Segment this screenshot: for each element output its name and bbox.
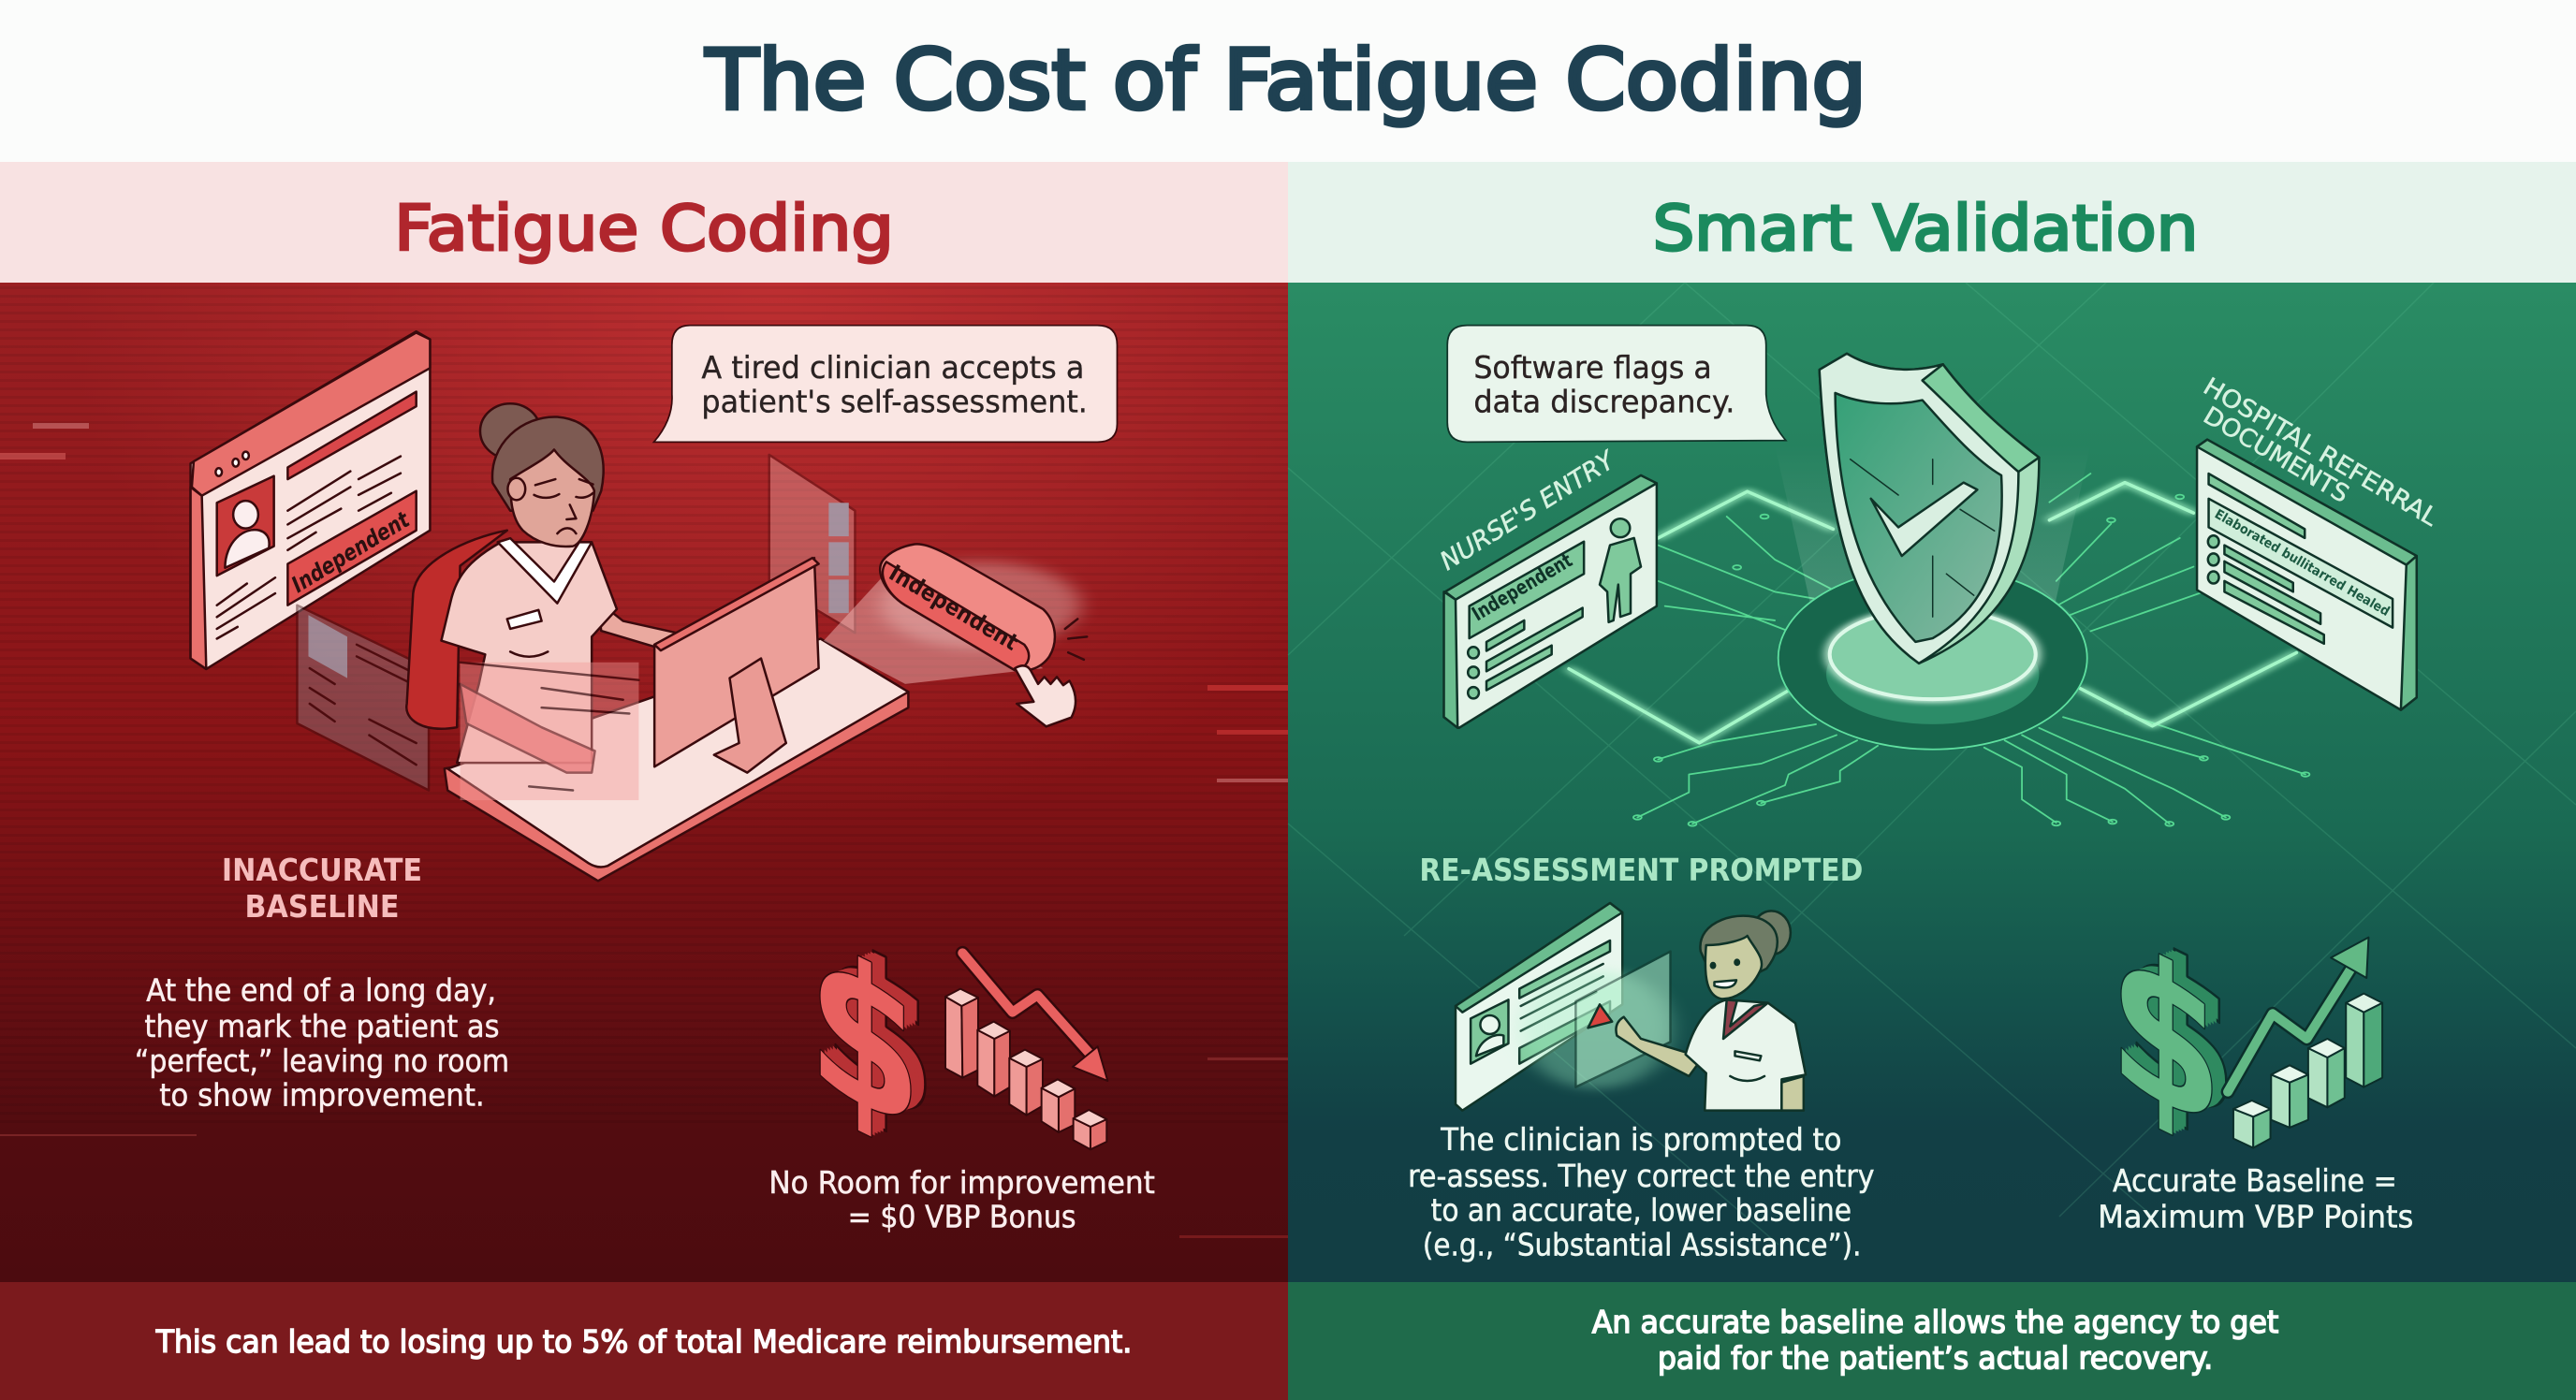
callout: tired clinician	[654, 326, 1117, 442]
text: end of a long day	[135, 972, 509, 1114]
label: hospital referral documents: DOCUMENTS	[2198, 401, 2353, 509]
footer: fatigue coding	[0, 1282, 1288, 1400]
title: The Cost of Fatigue Coding	[705, 32, 1866, 128]
text: accurate baseline	[2098, 1163, 2413, 1235]
callout: tired clinician: A tired clinician accepts a	[701, 350, 1084, 386]
text: clinician is prompted: (e.g., “Substantial Assistance”).	[1423, 1228, 1862, 1263]
illustration: nurse reassessing	[1456, 903, 1806, 1111]
text: no room for improvement: = $0 VBP Bonus	[848, 1200, 1076, 1235]
label: inaccurate baseline: INACCURATE	[222, 853, 422, 888]
dollar sign: $	[808, 900, 921, 1179]
panel: smart validation	[1288, 162, 2576, 1400]
glow: button beam	[824, 566, 1043, 684]
header band: fatigue coding: Fatigue Coding	[394, 192, 894, 265]
shield with check	[1820, 354, 2039, 664]
label: inaccurate baseline: BASELINE	[245, 889, 399, 925]
header band: smart validation: Smart Validation	[1653, 192, 2198, 265]
ghost overlay on desk	[461, 663, 638, 800]
label: independent on button: Independent	[885, 560, 1023, 656]
callout: software flags: data discrepancy.	[1473, 385, 1734, 420]
dollar sign: $	[2115, 896, 2229, 1174]
text: clinician is prompted: to an accurate, lower baseline	[1431, 1193, 1852, 1229]
card: hospital referral documents	[2197, 440, 2417, 710]
dollar sign: $	[812, 899, 925, 1178]
holographic overlay	[1521, 952, 1672, 1088]
label: inaccurate baseline	[222, 853, 422, 925]
panel background: red	[0, 283, 1288, 1282]
rising bars	[2228, 938, 2382, 1148]
label: re-assessment prompted: RE-ASSESSMENT PROMPTED	[1419, 853, 1863, 888]
text: end of a long day: “perfect,” leaving no room	[135, 1043, 509, 1079]
text: end of a long day: to show improvement.	[159, 1078, 485, 1114]
text: accurate baseline: Accurate Baseline =	[2113, 1163, 2397, 1199]
dollar sign: $	[814, 897, 928, 1176]
chair	[406, 531, 507, 729]
light beam	[1775, 445, 2090, 660]
label: independent on record: Independent	[287, 506, 415, 598]
diagram: circuit with shield	[1444, 354, 2417, 826]
text: clinician is prompted: re-assess. They correct the entry	[1408, 1159, 1875, 1194]
text: no room for improvement	[768, 1165, 1155, 1235]
monitor	[654, 558, 819, 773]
panel background: green	[1288, 283, 2576, 1282]
dollar sign: $	[823, 895, 936, 1174]
text: end of a long day: At the end of a long day,	[146, 972, 496, 1008]
label: independent on card: Independent	[1468, 549, 1576, 625]
illustration: nurse at desk	[191, 331, 1087, 881]
button: independent	[880, 544, 1081, 671]
footer: fatigue coding: This can lead to losing up to 5% of total Medicare reimbursement.	[155, 1324, 1132, 1360]
record window	[1456, 903, 1622, 1111]
circular platform	[1778, 567, 2087, 750]
header band: smart validation	[1288, 162, 2576, 283]
dollar sign: $	[2124, 893, 2237, 1172]
panel: fatigue coding	[0, 162, 1288, 1400]
text: accurate baseline: Maximum VBP Points	[2098, 1200, 2413, 1235]
ghost form right	[769, 455, 855, 633]
nurse	[1616, 911, 1806, 1111]
glowing circuit traces	[1569, 483, 2296, 743]
card: nurse's entry	[1444, 475, 1657, 728]
icon: rising dollar	[2109, 893, 2382, 1177]
callout: software flags: Software flags a	[1473, 350, 1712, 386]
falling bars	[945, 953, 1107, 1149]
ghost form left	[297, 605, 429, 791]
text: end of a long day: they mark the patient as	[144, 1009, 500, 1044]
nurse	[441, 403, 677, 773]
icon: hand cursor	[1015, 619, 1087, 726]
footer: smart validation: paid for the patient’s actual recovery.	[1658, 1341, 2213, 1377]
patient record window	[191, 331, 430, 669]
label: hospital referral documents: HOSPITAL REFERRAL	[2198, 372, 2443, 532]
thin circuit traces	[1633, 474, 2309, 826]
footer: smart validation	[1288, 1282, 2576, 1400]
footer: smart validation: An accurate baseline allows the agency to get	[1592, 1305, 2279, 1340]
dollar sign: $	[2121, 894, 2234, 1173]
desk	[445, 638, 908, 881]
dollar sign: $	[2113, 897, 2226, 1176]
dollar sign: $	[2109, 898, 2222, 1177]
callout: software flags	[1447, 326, 1786, 442]
dollar sign: $	[817, 897, 930, 1175]
text: no room for improvement: No Room for improvement	[768, 1165, 1155, 1201]
dollar sign: $	[2118, 895, 2232, 1174]
text: clinician is prompted	[1408, 1122, 1875, 1263]
header band: fatigue coding	[0, 162, 1288, 283]
label: nurse's entry: NURSE'S ENTRY	[1435, 445, 1621, 576]
callout: tired clinician: patient's self-assessment.	[701, 385, 1088, 420]
label: referral form field: Elaborated bullitarred Healed	[2212, 507, 2392, 620]
text: clinician is prompted: The clinician is prompted to	[1440, 1122, 1841, 1158]
icon: falling dollar	[808, 895, 1107, 1179]
dollar sign: $	[820, 896, 933, 1174]
